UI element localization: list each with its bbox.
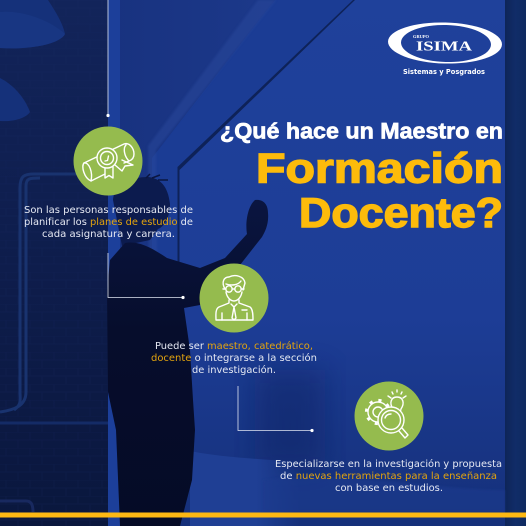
text: planes de estudio: planificar los planes de estudio de [24, 217, 193, 228]
logo: Grupo ISIMA: GRUPO [413, 35, 429, 39]
icon: gear, bulb and magnifier [354, 382, 424, 450]
connector line: middle [108, 253, 185, 299]
panel: planes de estudio [24, 126, 193, 240]
logo: Grupo ISIMA [387, 21, 503, 76]
text: maestro: docente o integrarse a la sección [151, 352, 317, 364]
text: investigacion [275, 458, 502, 494]
logo: Grupo ISIMA: ISIMA [416, 40, 473, 55]
silhouette: man leaning on wall [107, 174, 268, 526]
text: investigacion: con base en estudios. [335, 483, 443, 494]
title [220, 118, 503, 236]
connector line: bottom [238, 386, 314, 432]
title: ¿Qué hace un Maestro en [220, 118, 503, 144]
panel: maestro [151, 264, 317, 376]
text: maestro: Puede ser maestro, catedrático, [155, 340, 313, 352]
text: maestro [151, 340, 317, 376]
text: planes de estudio: Son las personas responsables de [24, 205, 193, 216]
icon: teacher [200, 264, 268, 332]
text: planes de estudio: cada asignatura y carrera. [42, 229, 175, 240]
text: investigacion: Especializarse en la investigación y propuesta [275, 458, 502, 470]
logo: Grupo ISIMA: Sistemas y Posgrados [403, 67, 485, 76]
text: planes de estudio [24, 205, 193, 240]
panel: investigacion [275, 382, 502, 494]
connector line: top [106, 0, 110, 117]
title: Docente? [299, 189, 503, 236]
icon: diploma [74, 126, 142, 196]
text: maestro: de investigación. [192, 364, 276, 376]
bottom yellow bar [0, 512, 526, 518]
text: investigacion: de nuevas herramientas para la enseñanza [280, 471, 497, 482]
title: Formación [256, 144, 503, 192]
